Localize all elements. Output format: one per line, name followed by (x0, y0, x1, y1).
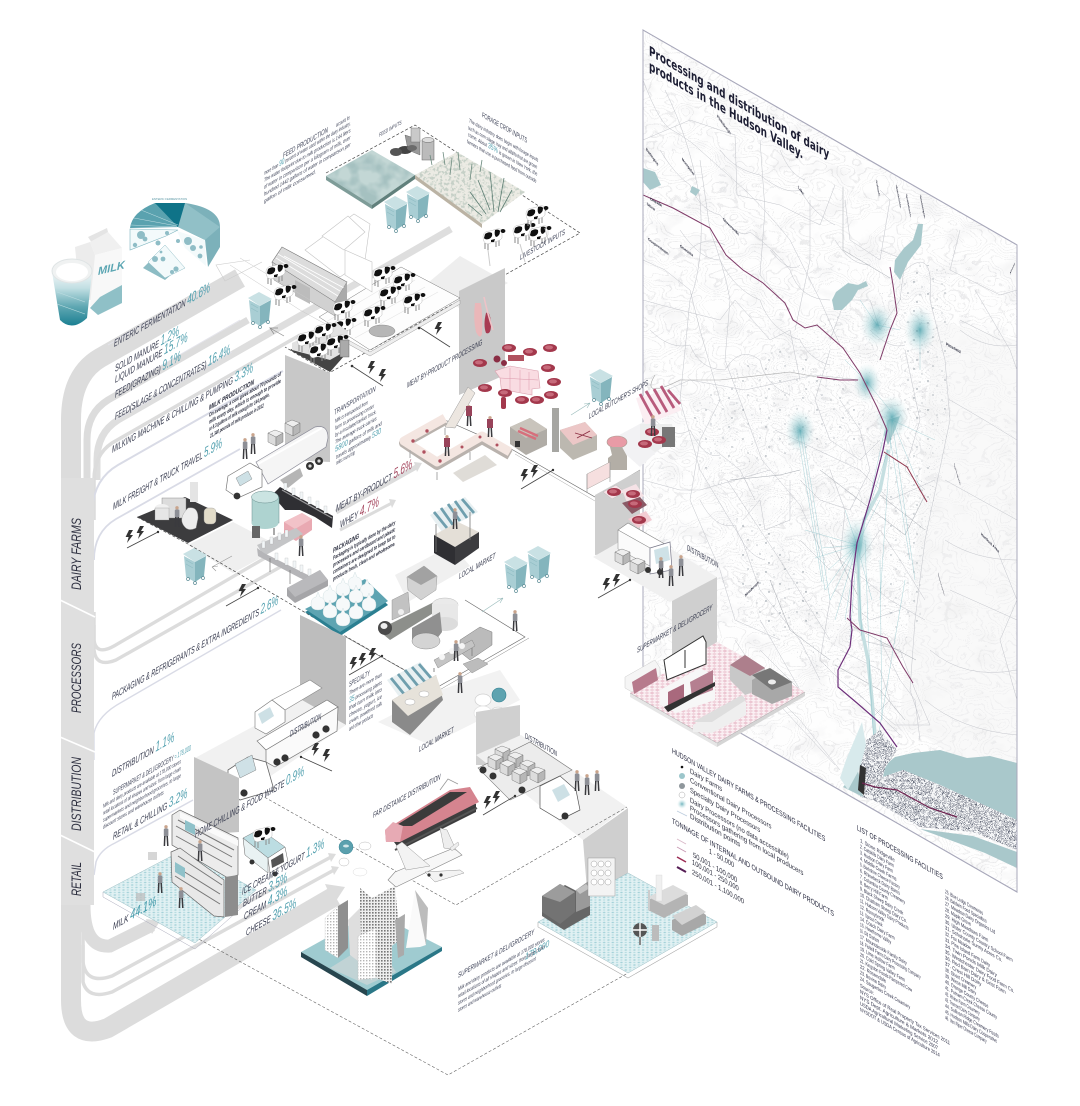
icon: waste bins at local market (504, 546, 551, 592)
icon: outlined farmhouse (305, 214, 372, 292)
text block: specialty (349, 668, 382, 733)
icon: distribution semi-truck (228, 700, 338, 800)
panel: feed and farm dashed plate (285, 125, 580, 373)
text block: supermarket and deli lower: retail locations of all shapes and sizes: from large chain (458, 944, 545, 1000)
label: distribution meat: DISTRIBUTION (687, 543, 718, 570)
map: place labels: Oneonta (680, 243, 694, 258)
icon: meat cuts ring (473, 344, 561, 409)
label: retail and chilling: RETAIL & CHILLING 3.2% (113, 784, 187, 843)
icon: globe and ceramics (339, 840, 371, 876)
map: place labels: Plattsburgh (717, 113, 731, 136)
arrow: machines to bin (571, 403, 590, 415)
map title: products in the Hudson Valley. (649, 59, 803, 163)
label: enteric fermentation: ENTERIC FERMENTATION 40.6% (114, 278, 210, 350)
text block: milk production: MILK PRODUCTION (209, 379, 255, 412)
flow ribbons: inputs converging into the supply chain column (71, 229, 451, 1032)
label: distribution percent: DISTRIBUTION 1.1% (112, 728, 174, 780)
map: place labels: Gloversville (723, 216, 739, 237)
icon: delivery truck and crates (615, 523, 683, 586)
list of processing facilities: 45. Hudson Mills Dairy Cooperative (945, 1009, 997, 1045)
text block: supermarket and deli lower (458, 927, 549, 1014)
text block: packaging (332, 520, 396, 583)
icon: refrigerated cases (625, 636, 792, 733)
text block: retail supermarket note: SUPERMARKET & DELI/GROCERY ≈ 178,000 (113, 743, 191, 797)
text block: packaging: products fresh, clean and wholesome. (332, 541, 396, 583)
icon: barn (230, 247, 347, 332)
list of processing facilities: 29. High Meadows Farm (945, 913, 989, 944)
text block: specialty: SPECIALTY (349, 668, 370, 689)
icon: grazing cows (266, 264, 425, 339)
icon: airplane (388, 828, 464, 887)
icon: pink box (284, 513, 312, 541)
map legend: facilities: Specialty Dairy Processors (690, 785, 760, 835)
icon: hanging carcass (474, 297, 493, 337)
map: place labels: Bennington (920, 193, 926, 221)
list of processing facilities: 42. Rhine Farm Creamery (945, 991, 980, 1017)
panel: packaged milk processor plate (305, 497, 529, 692)
towers (325, 886, 428, 984)
label: local market lower: LOCAL MARKET (419, 725, 454, 754)
sources: NYS Office of Real Property Tax Services 2011 (860, 989, 950, 1047)
list of processing facilities: 40. Orange County Cheese (945, 979, 988, 1010)
list of processing facilities: 39. Wiese Mill Dairy (945, 973, 976, 997)
list of processing facilities: 35. Westchester Dairy Food Farm Co. (945, 949, 1014, 995)
list of processing facilities: 34. Twin Ponds Milk Dairy (945, 943, 997, 979)
text block: transportation: farm to processing center (335, 403, 375, 432)
label: milk: MILK 44.1% (113, 892, 156, 933)
wall: milk production to processors (285, 355, 330, 462)
list of processing facilities: 20. Cold Spring Valley Farm (860, 952, 905, 984)
text block: retail supermarket note: Milk and dairy products are available at 178,000 stores (103, 759, 181, 810)
text block: feed production: more than 90 percent of water used within the dairy industry. (264, 118, 351, 177)
text block: retail supermarket note: discount stores and warehouse outlets (103, 790, 164, 831)
label: ice cream: ICE CREAM & YOGURT 1.3% (242, 834, 324, 898)
list of processing facilities: 12. Ronnybrook (860, 904, 884, 924)
text block: milk production: milk every day, which is enough to provide (209, 378, 281, 426)
label: local butchers shops: LOCAL BUTCHER'S SHOPS (589, 378, 648, 421)
list of processing facilities: 30. Ulster County Country School Farm (945, 919, 1013, 964)
icon: grey wrapping machine (287, 570, 328, 603)
text block: packaging: containers are designed to keep fat to (333, 534, 396, 576)
icon: teal tank (252, 491, 279, 538)
cheese wedge (143, 245, 185, 280)
list of processing facilities: LIST OF PROCESSING FACILITIES (857, 823, 943, 882)
list of processing facilities: 25. Blue Ledge Creameries (945, 889, 983, 917)
icon: ice cream van (243, 827, 288, 876)
map legend: facilities: Processors gathering from local producers (690, 803, 804, 878)
Long Island sound and land (883, 750, 1017, 820)
text block: supermarket and deli lower: 178,000 (525, 938, 549, 962)
icon: cows (483, 206, 551, 266)
panel: dairy farm plate (216, 214, 460, 356)
text block: supermarket and deli lower: SUPERMARKET & DELI/GROCERY (458, 927, 535, 980)
icon: processing machinery on dark plate (155, 482, 216, 530)
inputs labels group (112, 278, 412, 939)
icon: milking parlour (290, 322, 349, 372)
map: place labels: Nyack (853, 718, 854, 736)
fan lines (798, 300, 935, 760)
icon: vendor (458, 672, 462, 693)
list of processing facilities: 28. Maple Grove (945, 907, 971, 928)
text block: specialty: 35 processing plants (349, 677, 382, 705)
ribbon arrow heads (146, 462, 422, 934)
map legend: tonnage: 50,001 - 100,000 (693, 850, 737, 885)
forage crop terrain block (415, 152, 525, 228)
map legend: facilities: Distribution points (690, 811, 741, 849)
tanker truck (226, 420, 328, 499)
panel: distribution wall to truck (476, 705, 520, 765)
list of processing facilities: 17. Mountainside Family Dairy (860, 934, 907, 967)
text block: forage crop inputs: FORAGE CROP INPUTS (482, 110, 527, 145)
text block: forage crop inputs: such as corn silage, hay and alfalfa that are grown (468, 125, 537, 171)
panel: retail plate (103, 810, 256, 949)
list of processing facilities: 1. Stone Ridgeville (860, 838, 895, 864)
icon: cheese plates (463, 658, 506, 720)
arrow: distribution energy (300, 743, 332, 771)
label: home chilling: HOME CHILLING & FOOD WASTE 0.9% (195, 762, 304, 841)
arrow: meat energy (521, 465, 554, 489)
list of processing facilities: 31. Schoharie Sunny Acres Co. (945, 925, 1002, 964)
list of processing facilities: 15. Hawthorne Valley (860, 922, 891, 946)
icon: customers and counters (633, 875, 706, 945)
icon: pig cut chart (495, 366, 540, 395)
list of processing facilities (857, 823, 1014, 1059)
feed production terrain block (326, 150, 415, 209)
Hudson river (858, 450, 888, 785)
list of processing facilities: 33. Pine Island Farm Dairy (945, 937, 990, 969)
panel: meat truck plate (593, 523, 717, 602)
list of processing facilities: 16. Old Chatham (860, 928, 879, 945)
sources: NYSDOT & USDA Census of Agriculture 2014 (860, 1007, 940, 1059)
column label: processors: PROCESSORS (68, 643, 84, 713)
text block: feed production: hundred 1442 gallons of water in comparison per (264, 142, 351, 198)
list of processing facilities: 11. Hudson Valley Dairy Products (860, 898, 909, 932)
icon: shelf of cheese (588, 858, 615, 896)
icon: milk cup (52, 259, 92, 326)
icon: milk carton (75, 228, 126, 315)
text block: packaging: Packaging is typically done by the dairy (333, 520, 396, 562)
map: place labels: Utica (647, 201, 655, 212)
column label: dairy farms: DAIRY FARMS (68, 518, 84, 590)
text block: transportation: 5800 gallons of milk and (335, 418, 382, 454)
list of processing facilities: 3. Hudson Dairy Farm (860, 850, 893, 875)
list of processing facilities: 23. Bovina Dairy (860, 970, 886, 991)
icon: waste bin at processing (183, 548, 207, 584)
list of processing facilities: 22. Rosendale (860, 964, 886, 985)
text block: milk production: On average, a cow gives about 70 pounds of (209, 371, 282, 419)
icon: flatbed truck with crates (478, 742, 599, 820)
map: place labels: Montpelier (682, 156, 695, 177)
icon: smoker and grinder machines (510, 408, 627, 492)
text block: transportation: Milk is transported from (335, 400, 368, 425)
label: meat by-product: MEAT BY-PRODUCT 5.6% (336, 455, 412, 515)
map: place labels: Newburgh (745, 579, 759, 598)
panel: meat processing plate (404, 344, 682, 501)
map: place labels: Oneida (650, 196, 662, 208)
map: place labels: Hartford Area (981, 531, 999, 554)
arrow: truck energy (483, 791, 516, 815)
text block: packaging: PACKAGING (333, 533, 359, 555)
text block: supermarket and deli lower: Milk and dairy products are available at 178,000 stores (458, 937, 545, 993)
label: livestock inputs: LIVESTOCK INPUTS (520, 227, 565, 262)
truck lettering: DISTRIBUTION (290, 711, 321, 739)
icon: milk bags on teal pallets (305, 572, 388, 636)
map legend: facilities: Dairy Farms (690, 766, 722, 794)
map: place labels: Cooperstown (648, 236, 669, 257)
list of processing facilities: 26. Baldwin Food Specialties (945, 895, 987, 925)
list of processing facilities: 24. Saugerties Creek Creamery (860, 976, 910, 1011)
list of processing facilities: 8. Berry Hill Farm (860, 880, 888, 902)
list of processing facilities: 44. Sullivan Ridge Creamery Foods (945, 1003, 999, 1040)
label: milk freight: MILK FREIGHT & TRUCK TRAVEL 5.9% (113, 434, 222, 513)
outbound tonnage routes (643, 195, 927, 747)
arrow: milking energy (351, 361, 386, 386)
text block: specialty: and other products (349, 713, 373, 733)
label: milking: MILKING MACHINE & CHILLING & PUMPING 3.3% (112, 358, 253, 456)
list of processing facilities: 9. Black Sheep Dairy Creek (860, 886, 903, 917)
text block: retail supermarket note: supermarkets and neighborhood groceries, to large (103, 773, 181, 824)
label: butter: BUTTER 3.5% (243, 868, 287, 910)
pie chart: cheese wheel of dairy footprint: ENTERIC FERMENTATION (152, 197, 187, 201)
wall: grocery (583, 808, 628, 890)
list of processing facilities: 32. Fox Meadow (945, 931, 971, 952)
text block: milk production: or 8.3 gallons of milk enough for 144 people. (209, 392, 270, 433)
text block: retail supermarket note: retail locations of all shapes and sizes: from large chain (103, 766, 181, 817)
list of processing facilities: 10. Chatham Sheep Dairy Co. (860, 892, 907, 925)
label: distribution lower: DISTRIBUTION (525, 731, 557, 759)
label: solid manure: SOLID MANURE 1.2% (115, 322, 179, 375)
panel: supermarket meat floor (625, 636, 805, 747)
panel: supermarket dairy floor (538, 858, 717, 978)
icon: waste bins near feed (384, 186, 430, 232)
icon: waste bin at butcher (589, 369, 613, 406)
text block: forage crop inputs: farmers that use a purchased feed from outside (467, 139, 536, 185)
text block: transportation (334, 384, 382, 467)
label: meat by-product processing: MEAT BY-PRODUCT PROCESSING (407, 337, 482, 390)
label: liquid manure: LIQUID MANURE 15.7% (115, 328, 188, 386)
map: place labels: Keene (1010, 259, 1015, 276)
text block: supermarket and deli lower: stores and warehouse outlets (458, 983, 501, 1014)
text block: feed production: FEED PRODUCTION (283, 125, 328, 160)
text block: specialty: There are more than (349, 672, 382, 697)
supply chain column (60, 478, 95, 905)
icon: forage plants (430, 152, 482, 180)
map legend: tonnage: TONNAGE OF INTERNAL AND OUTBOUND DAIRY PRODUCTS (672, 816, 834, 919)
text block: feed production: The water footprint due to milk production is 144 liters (264, 128, 351, 184)
text block: feed production: accounts for (336, 115, 350, 129)
list of processing facilities: 5. Berkshire Cheese Factory (860, 862, 900, 891)
panel: local market with specialty products (378, 658, 520, 745)
text block: transportation: by a insulated tanker truck. (335, 409, 377, 439)
icon: pink butcher stall (636, 386, 682, 452)
list of processing facilities: 13. Sprout Creek (860, 910, 883, 929)
wall: distribution to retail (194, 757, 239, 835)
icon: small delivery truck (255, 680, 322, 734)
text block: transportation: The average truck carries (335, 416, 377, 446)
text block: milk production: 21,340 pounds of milk produce in 2012 (209, 403, 264, 440)
text block: specialty: cheese, yogurt, ice (349, 694, 382, 719)
text block: specialty: cream, powdered milk (349, 701, 382, 726)
water bodies (643, 168, 923, 445)
map: place labels: Brattleboro (906, 192, 912, 219)
list of processing facilities: 27. Meadow Dairy Organics Ltd (945, 901, 995, 936)
label: local market: LOCAL MARKET (459, 551, 496, 581)
map: place labels: Springfield (954, 461, 960, 487)
column label: retail: RETAIL (68, 862, 84, 896)
map: place labels: Pittsfield (946, 341, 961, 355)
icon: teal market stall (430, 497, 479, 565)
panel: meat distribution wall (595, 470, 640, 555)
wall: meat by-product processing (459, 268, 505, 395)
text block: specialty: that turn milk into (349, 687, 382, 712)
text block: supermarket and deli lower: stores and neighborhood groceries, to large discount (458, 956, 536, 1007)
label: supermarket and deli meat: SUPERMARKET & DELI/GROCERY (637, 602, 713, 655)
panel: truck plate (195, 680, 346, 800)
label: packaging and refrigerants: PACKAGING & REFRIGERANTS & EXTRA INGREDIENTS 2.6% (112, 591, 278, 703)
list of processing facilities: 37. Crest Hill Dairy (945, 961, 982, 988)
panel: livestock inputs plate (429, 206, 551, 309)
list of processing facilities: 36. Red Barn Dairy & Grist Farm (945, 955, 1006, 996)
map: place labels: Burlington (646, 146, 659, 168)
icon: packaged meat trays (603, 484, 652, 528)
icon: bottle conveyor (257, 483, 332, 594)
label: feed silage: FEED(SILAGE & CONCENTRATES) 16.4% (115, 340, 230, 423)
list of processing facilities: 18. Fishkill Farms Dairy Processing Company (860, 940, 921, 981)
column label: distribution: DISTRIBUTION (68, 756, 84, 831)
pie chart: cheese wheel of dairy footprint (130, 197, 220, 280)
list of processing facilities: 4. Middle Creek Farms (860, 856, 897, 883)
icon: waste bin at barn (248, 292, 272, 328)
map: place labels: Rutland (876, 178, 880, 198)
text block: feed production (264, 115, 351, 205)
label: whey: WHEY 4.7% (340, 492, 379, 531)
map title (649, 44, 829, 163)
sources: USDA Agricultural Marketing Service 2007 (860, 1001, 938, 1052)
list of processing facilities: 41. Putnam Creek Cheese County (945, 985, 997, 1021)
label: cream: CREAM 4.3% (244, 882, 287, 923)
label: feed inputs: FEED INPUTS (379, 120, 402, 139)
list of processing facilities: 6. Rhinebeck Dairy Barns (860, 868, 900, 897)
sources: Source: (860, 983, 874, 997)
text block: forage crop inputs: The dairy industry does begin with forage inputs (469, 118, 538, 164)
text block: retail supermarket note (103, 743, 191, 831)
dashed plate: far distance and retail chain (195, 758, 628, 1075)
text block: forage crop inputs: come. About 35% is grown in New York, the (468, 129, 537, 178)
text block: feed production: gallon of milk consumed. (264, 169, 316, 205)
wall: supermarket (672, 577, 717, 660)
sources: NYS Dept. Agriculture & Markets 2012 (860, 995, 938, 1046)
list of processing facilities: 2. Catskills Dairy Farm (860, 844, 894, 870)
arrow: meat truck energy (598, 574, 631, 598)
arrow: farm energy (418, 322, 450, 347)
teal facility blobs (785, 303, 936, 573)
map legend: tonnage: 100,001 - 250,000 (692, 857, 739, 893)
panel: long distance truck plate (476, 735, 627, 840)
arrow: market to bins (482, 598, 503, 612)
icon: retail shelves (136, 810, 238, 917)
label: far distance distribution: FAR DISTANCE DISTRIBUTION (373, 772, 441, 820)
map: place labels (646, 113, 1015, 736)
map legend: tonnage: 250,001 - 1,100,000 (692, 867, 744, 906)
icon: freight train (385, 779, 479, 850)
map: place labels: Manchester (896, 183, 902, 210)
map legend: facilities: Conventional Dairy Processors (690, 775, 772, 831)
icon: teal stall (387, 662, 443, 735)
list of processing facilities: 43. Tremont Dairy Company (945, 997, 980, 1023)
arrow: packaging energy (226, 584, 259, 606)
list of processing facilities: 7. Columbia County Creamery (860, 874, 905, 906)
text block: transportation: TRANSPORTATION (334, 384, 376, 417)
wall: processors to distribution (300, 615, 346, 725)
panel: dark milk processing plate (137, 482, 340, 633)
icon: city (301, 886, 442, 996)
arrow: barn to bin (270, 328, 284, 336)
map legend: facilities: Dairy Processors (no data accessible) (690, 795, 789, 861)
map legend: facilities: HUDSON VALLEY DAIRY FARMS & PROCESSING FACILITIES (672, 746, 825, 844)
list of processing facilities: 46. Van Riper Cheese Company (945, 1015, 987, 1045)
icon: ovens (542, 880, 590, 930)
label: cheese: CHEESE 36.5% (246, 894, 296, 939)
list of processing facilities: 21. Kingston Foods Pampered Cow (860, 958, 912, 994)
text block: forage crop inputs (467, 110, 538, 185)
list of processing facilities: 19. Lime Hollow Farm (860, 946, 895, 972)
icon: milk carton: MILK (98, 259, 126, 278)
arrow: processing energy left (126, 526, 159, 548)
map title: Processing and distribution of dairy (649, 44, 829, 163)
text block: feed production: of water in comparison per a kilogram of milk, over (264, 135, 351, 191)
map: place labels: New Haven (938, 571, 945, 598)
text block: transportation: travels approximately 530 (336, 426, 381, 461)
text block: packaging: processors and cardboard and plastic (332, 527, 396, 569)
arrow: specialty energy (349, 648, 383, 675)
text block: milk production (209, 371, 282, 440)
text block: transportation: miles round trip (336, 450, 355, 467)
panel: milk bottling line (252, 468, 333, 603)
list of processing facilities: 38. Ghent Creamery (945, 967, 976, 991)
arrow: bottling to bin (212, 556, 232, 571)
map legend: tonnage: 1 - 50,000 (709, 846, 734, 870)
icon: meat conveyor with workers (404, 387, 510, 482)
map: place labels: Lake (798, 184, 804, 197)
icon: cheese making machines (378, 566, 517, 672)
icon: feed silos and sacks (390, 128, 434, 160)
list of processing facilities: 14. Coach Dairy Farm (860, 916, 895, 942)
label: feed grazing: FEED(GRAZING) 9.1% (115, 347, 181, 401)
